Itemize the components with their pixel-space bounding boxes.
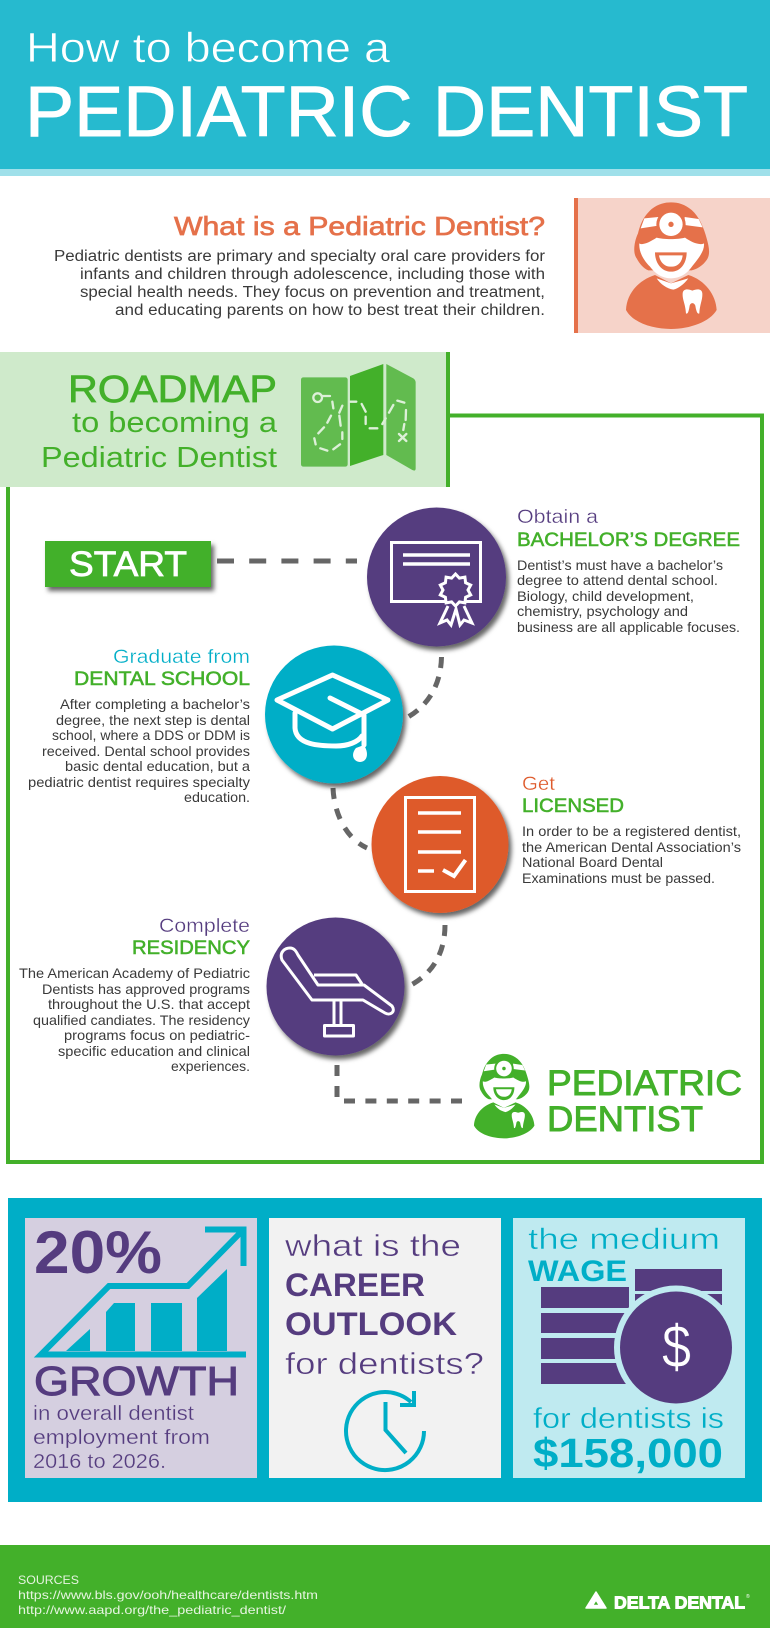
text: growth description: 2016 to 2026. — [33, 1450, 166, 1473]
card: median wage — [513, 1218, 745, 1478]
icon panel: dentist — [574, 198, 770, 333]
text block: obtain a bachelor's degree: Dentist’s must have a bachelor’s — [517, 557, 723, 573]
icon: clock — [346, 1391, 424, 1470]
icon: diploma — [367, 508, 506, 646]
step 4: residency — [19, 916, 404, 1074]
destination: pediatric dentist — [474, 1054, 742, 1139]
text: for dentists is $158,000 — [533, 1403, 724, 1476]
subheading line 1: to becoming a — [72, 407, 277, 439]
text block: graduate from dental school: DENTAL SCHOOL — [74, 668, 250, 690]
logo: delta dental: ® — [746, 1593, 750, 1600]
text block: get licensed: In order to be a registered dentist, — [522, 823, 741, 839]
heading: what is the career outlook: what is the — [284, 1228, 461, 1263]
chart: rising growth arrow — [41, 1230, 246, 1354]
text: growth description: in overall dentist — [33, 1402, 194, 1425]
text block: obtain a bachelor's degree: BACHELOR’S DEGREE — [517, 529, 740, 551]
footer — [0, 1545, 770, 1628]
text block: get licensed: Examinations must be passed. — [522, 870, 715, 886]
label: pediatric dentist — [547, 1063, 742, 1139]
text block: obtain a bachelor's degree: business are all applicable focuses. — [517, 619, 740, 635]
text: the medium wage: WAGE — [528, 1255, 627, 1288]
heading: what is the career outlook: OUTLOOK — [285, 1306, 457, 1342]
card: career outlook question — [269, 1218, 501, 1478]
panel: career outlook — [8, 1198, 762, 1502]
text: sources — [18, 1573, 318, 1617]
text block: obtain a bachelor's degree: chemistry, psychology and — [517, 603, 688, 619]
icon: checklist document — [372, 776, 508, 913]
text block: graduate from dental school: school, where a DDS or DDM is — [52, 727, 250, 743]
title line 1: How to become a — [26, 24, 391, 71]
text block: obtain a bachelor's degree — [517, 507, 740, 635]
text block: graduate from dental school: pediatric dentist requires specialty — [28, 774, 250, 790]
text block: get licensed: the American Dental Association’s — [522, 839, 741, 855]
text block: definition: and educating parents on how to best treat their children. — [115, 302, 545, 319]
panel: what is a pediatric dentist — [54, 198, 770, 333]
roadmap frame — [8, 416, 762, 1162]
text: growth description — [33, 1402, 210, 1473]
text block: complete residency: experiences. — [171, 1058, 250, 1074]
icon: dental chair — [266, 918, 404, 1056]
text block: definition — [54, 248, 545, 319]
text block: complete residency: RESIDENCY — [132, 937, 250, 959]
title line 2: PEDIATRIC DENTIST — [25, 73, 748, 152]
text block: complete residency: throughout the U.S. that accept — [48, 996, 250, 1012]
icon: graduation cap — [265, 646, 403, 784]
stat: 20%: 20% — [34, 1219, 162, 1286]
text block: get licensed: Get — [522, 774, 556, 795]
step 3: licensed — [372, 774, 741, 913]
arrow: dashed path through the roadmap — [217, 561, 462, 1101]
card: growth — [25, 1218, 257, 1478]
text: sources: SOURCES — [18, 1573, 79, 1587]
icon: map — [301, 364, 416, 471]
text: for dentists is $158,000: $158,000 — [533, 1430, 723, 1476]
text block: get licensed: LICENSED — [522, 795, 624, 817]
icon: stacked coins with dollar: $ — [662, 1313, 691, 1380]
text block: graduate from dental school: Graduate from — [113, 647, 250, 668]
icon: dentist — [626, 202, 717, 329]
text block: complete residency: qualified candiates. The residency — [33, 1012, 250, 1028]
text block: graduate from dental school — [28, 647, 250, 805]
text: growth description: employment from — [33, 1426, 210, 1449]
icon: stacked coins with dollar — [541, 1269, 738, 1410]
text block: complete residency: programs focus on pediatric- — [64, 1027, 250, 1043]
text block: complete residency: specific education and clinical — [58, 1043, 250, 1059]
text block: graduate from dental school: received. Dental school provides — [42, 743, 250, 759]
text: the medium wage: the medium — [528, 1223, 720, 1256]
text block: graduate from dental school: degree, the next step is dental — [56, 712, 250, 728]
text block: obtain a bachelor's degree: Obtain a — [517, 507, 598, 528]
text block: definition: infants and children through adolescence, including those with — [80, 266, 545, 283]
logo: delta dental: DELTA DENTAL — [614, 1592, 745, 1612]
text block: complete residency: The American Academy of Pediatric — [19, 965, 250, 981]
text block: obtain a bachelor's degree: degree to attend dental school. — [517, 572, 718, 588]
start button — [45, 541, 211, 587]
text block: graduate from dental school: education. — [184, 789, 250, 805]
subheading line 2: Pediatric Dentist — [41, 442, 277, 474]
heading: what is the career outlook — [284, 1228, 484, 1381]
heading: what is the career outlook: CAREER — [285, 1267, 425, 1303]
text block: definition: Pediatric dentists are primary and specialty oral care providers for — [54, 248, 545, 265]
heading: roadmap: ROADMAP — [68, 369, 277, 411]
heading: growth: GROWTH — [34, 1358, 239, 1404]
text: sources: https://www.bls.gov/ooh/healthcare/dentists.htm — [18, 1588, 318, 1602]
label: pediatric dentist: DENTIST — [547, 1099, 703, 1139]
panel: roadmap heading — [0, 352, 450, 487]
text block: definition: special health needs. They focus on prevention and treatment, — [80, 284, 545, 301]
text: for dentists is $158,000: for dentists is — [533, 1403, 724, 1435]
header banner — [0, 0, 770, 176]
step 2: dental school — [28, 646, 403, 805]
text block: graduate from dental school: After completing a bachelor’s — [60, 696, 250, 712]
text block: graduate from dental school: basic dental education, but a — [65, 758, 250, 774]
start button: START — [69, 545, 187, 584]
text block: complete residency — [19, 916, 250, 1074]
text block: obtain a bachelor's degree: Biology, child development, — [517, 588, 694, 604]
label: pediatric dentist: PEDIATRIC — [547, 1063, 742, 1103]
heading: what is: What is a Pediatric Dentist? — [174, 211, 545, 241]
text block: complete residency: Complete — [159, 916, 250, 937]
step 1: bachelor's degree — [367, 507, 740, 646]
heading: what is the career outlook: for dentists? — [285, 1346, 484, 1381]
text block: get licensed — [522, 774, 741, 886]
text: the medium wage — [528, 1223, 720, 1288]
text block: get licensed: National Board Dental — [522, 854, 663, 870]
text block: complete residency: Dentists has approved programs — [42, 981, 250, 997]
icon: green dentist — [474, 1054, 534, 1138]
text: sources: http://www.aapd.org/the_pediatric_dentist/ — [18, 1603, 287, 1617]
